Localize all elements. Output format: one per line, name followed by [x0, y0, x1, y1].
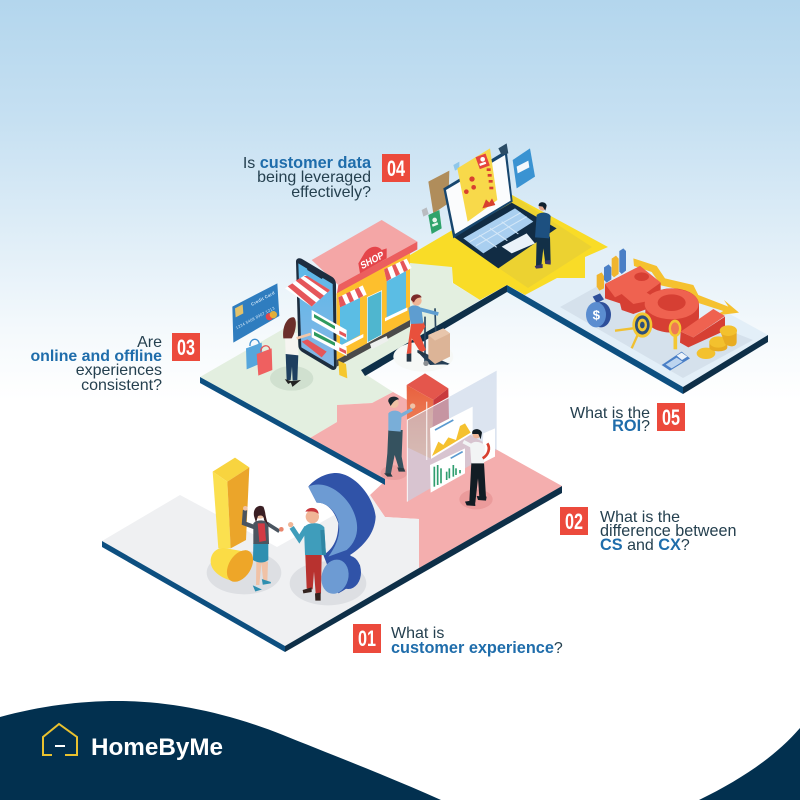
smartphone [285, 258, 347, 378]
illustration: laptop with data cards [422, 143, 557, 269]
laptop [443, 143, 557, 268]
icon: question mark [308, 473, 376, 597]
callout: question 02: 02 [565, 509, 583, 534]
icon: coin stacks [697, 325, 737, 359]
callout: question 05: What is the [570, 405, 650, 422]
callout: question 01: 01 [358, 626, 376, 651]
icon: HomeByMe logo house [43, 724, 77, 755]
illustration: store with phone and credit card [232, 220, 453, 391]
red block [407, 373, 449, 459]
callout: question 03 [30, 333, 200, 394]
shop building [312, 220, 417, 367]
green bar chart card [430, 448, 465, 493]
credit card: 1234 5468 8907 1213 [235, 305, 276, 330]
callout: question 05 [570, 403, 685, 435]
trend arrow [633, 258, 739, 316]
callout: question 02: What is the [600, 509, 680, 526]
bar chart icon [597, 248, 626, 291]
callout: question 02 [560, 507, 736, 554]
callout: question 04 [243, 154, 410, 201]
callout: question 01: What is [391, 625, 444, 642]
panel: pink CS vs CX platform [200, 377, 562, 575]
worker with cart figure [393, 294, 453, 372]
callout: question 03: 03 [177, 335, 195, 360]
callout: question 02: CS and CX? [600, 536, 690, 554]
letter R [605, 266, 661, 314]
shopper figure [270, 317, 313, 391]
floating cards [422, 148, 535, 234]
icon: magnifier [669, 320, 681, 349]
illustration: data dashboards with two analysts [381, 371, 497, 509]
shopping bags [246, 339, 272, 376]
callout: question 03: online and offline [30, 348, 162, 365]
illustration: ROI letters and finance icons [586, 248, 739, 371]
panel: yellow data platform [410, 195, 608, 300]
panel: grey customer experience platform [102, 495, 419, 652]
callout: question 03: experiences [76, 362, 162, 379]
icon: target with arrows [615, 312, 652, 348]
background gradient [0, 0, 800, 400]
letter O [645, 288, 699, 333]
callout: question 01 [353, 624, 563, 657]
credit card: Credit Card [250, 290, 276, 307]
letter I [680, 309, 725, 347]
credit card [232, 283, 279, 343]
callout: question 01: customer experience? [391, 639, 563, 657]
analyst woman figure [381, 397, 415, 480]
illustration: exclamation mark and question mark with people [207, 458, 376, 605]
glass panel [407, 371, 497, 502]
data analyst figure [535, 202, 551, 269]
callout: question 05: ROI? [612, 417, 650, 435]
callout: question 04: Is customer data [243, 154, 372, 172]
man figure [288, 508, 326, 601]
woman figure [243, 506, 284, 591]
callout: question 03: consistent? [81, 377, 162, 394]
yellow report on screen [457, 148, 497, 222]
footer wave left [0, 701, 441, 800]
callout: question 04: being leveraged [257, 169, 371, 186]
logo wordmark: HomeByMe [91, 734, 223, 761]
icon: exclamation mark [211, 458, 259, 587]
callout: question 02: difference between [600, 522, 736, 540]
callout: question 03: Are [137, 334, 162, 351]
small side card [482, 428, 495, 463]
shop sign: SHOP [360, 250, 386, 272]
yellow area chart card [430, 407, 473, 459]
icon: money bag: $ [593, 307, 601, 322]
callout: question 04: 04 [387, 156, 406, 181]
panel: ROI platform [507, 247, 768, 394]
footer wave right [699, 728, 800, 800]
callout: question 05: 05 [662, 405, 680, 430]
analyst man figure [459, 429, 493, 509]
callout: question 04: effectively? [291, 184, 371, 201]
shadows [207, 551, 366, 605]
panel: green store platform [200, 250, 507, 438]
icon: money bag [586, 293, 611, 327]
icon: calculator [662, 352, 690, 371]
